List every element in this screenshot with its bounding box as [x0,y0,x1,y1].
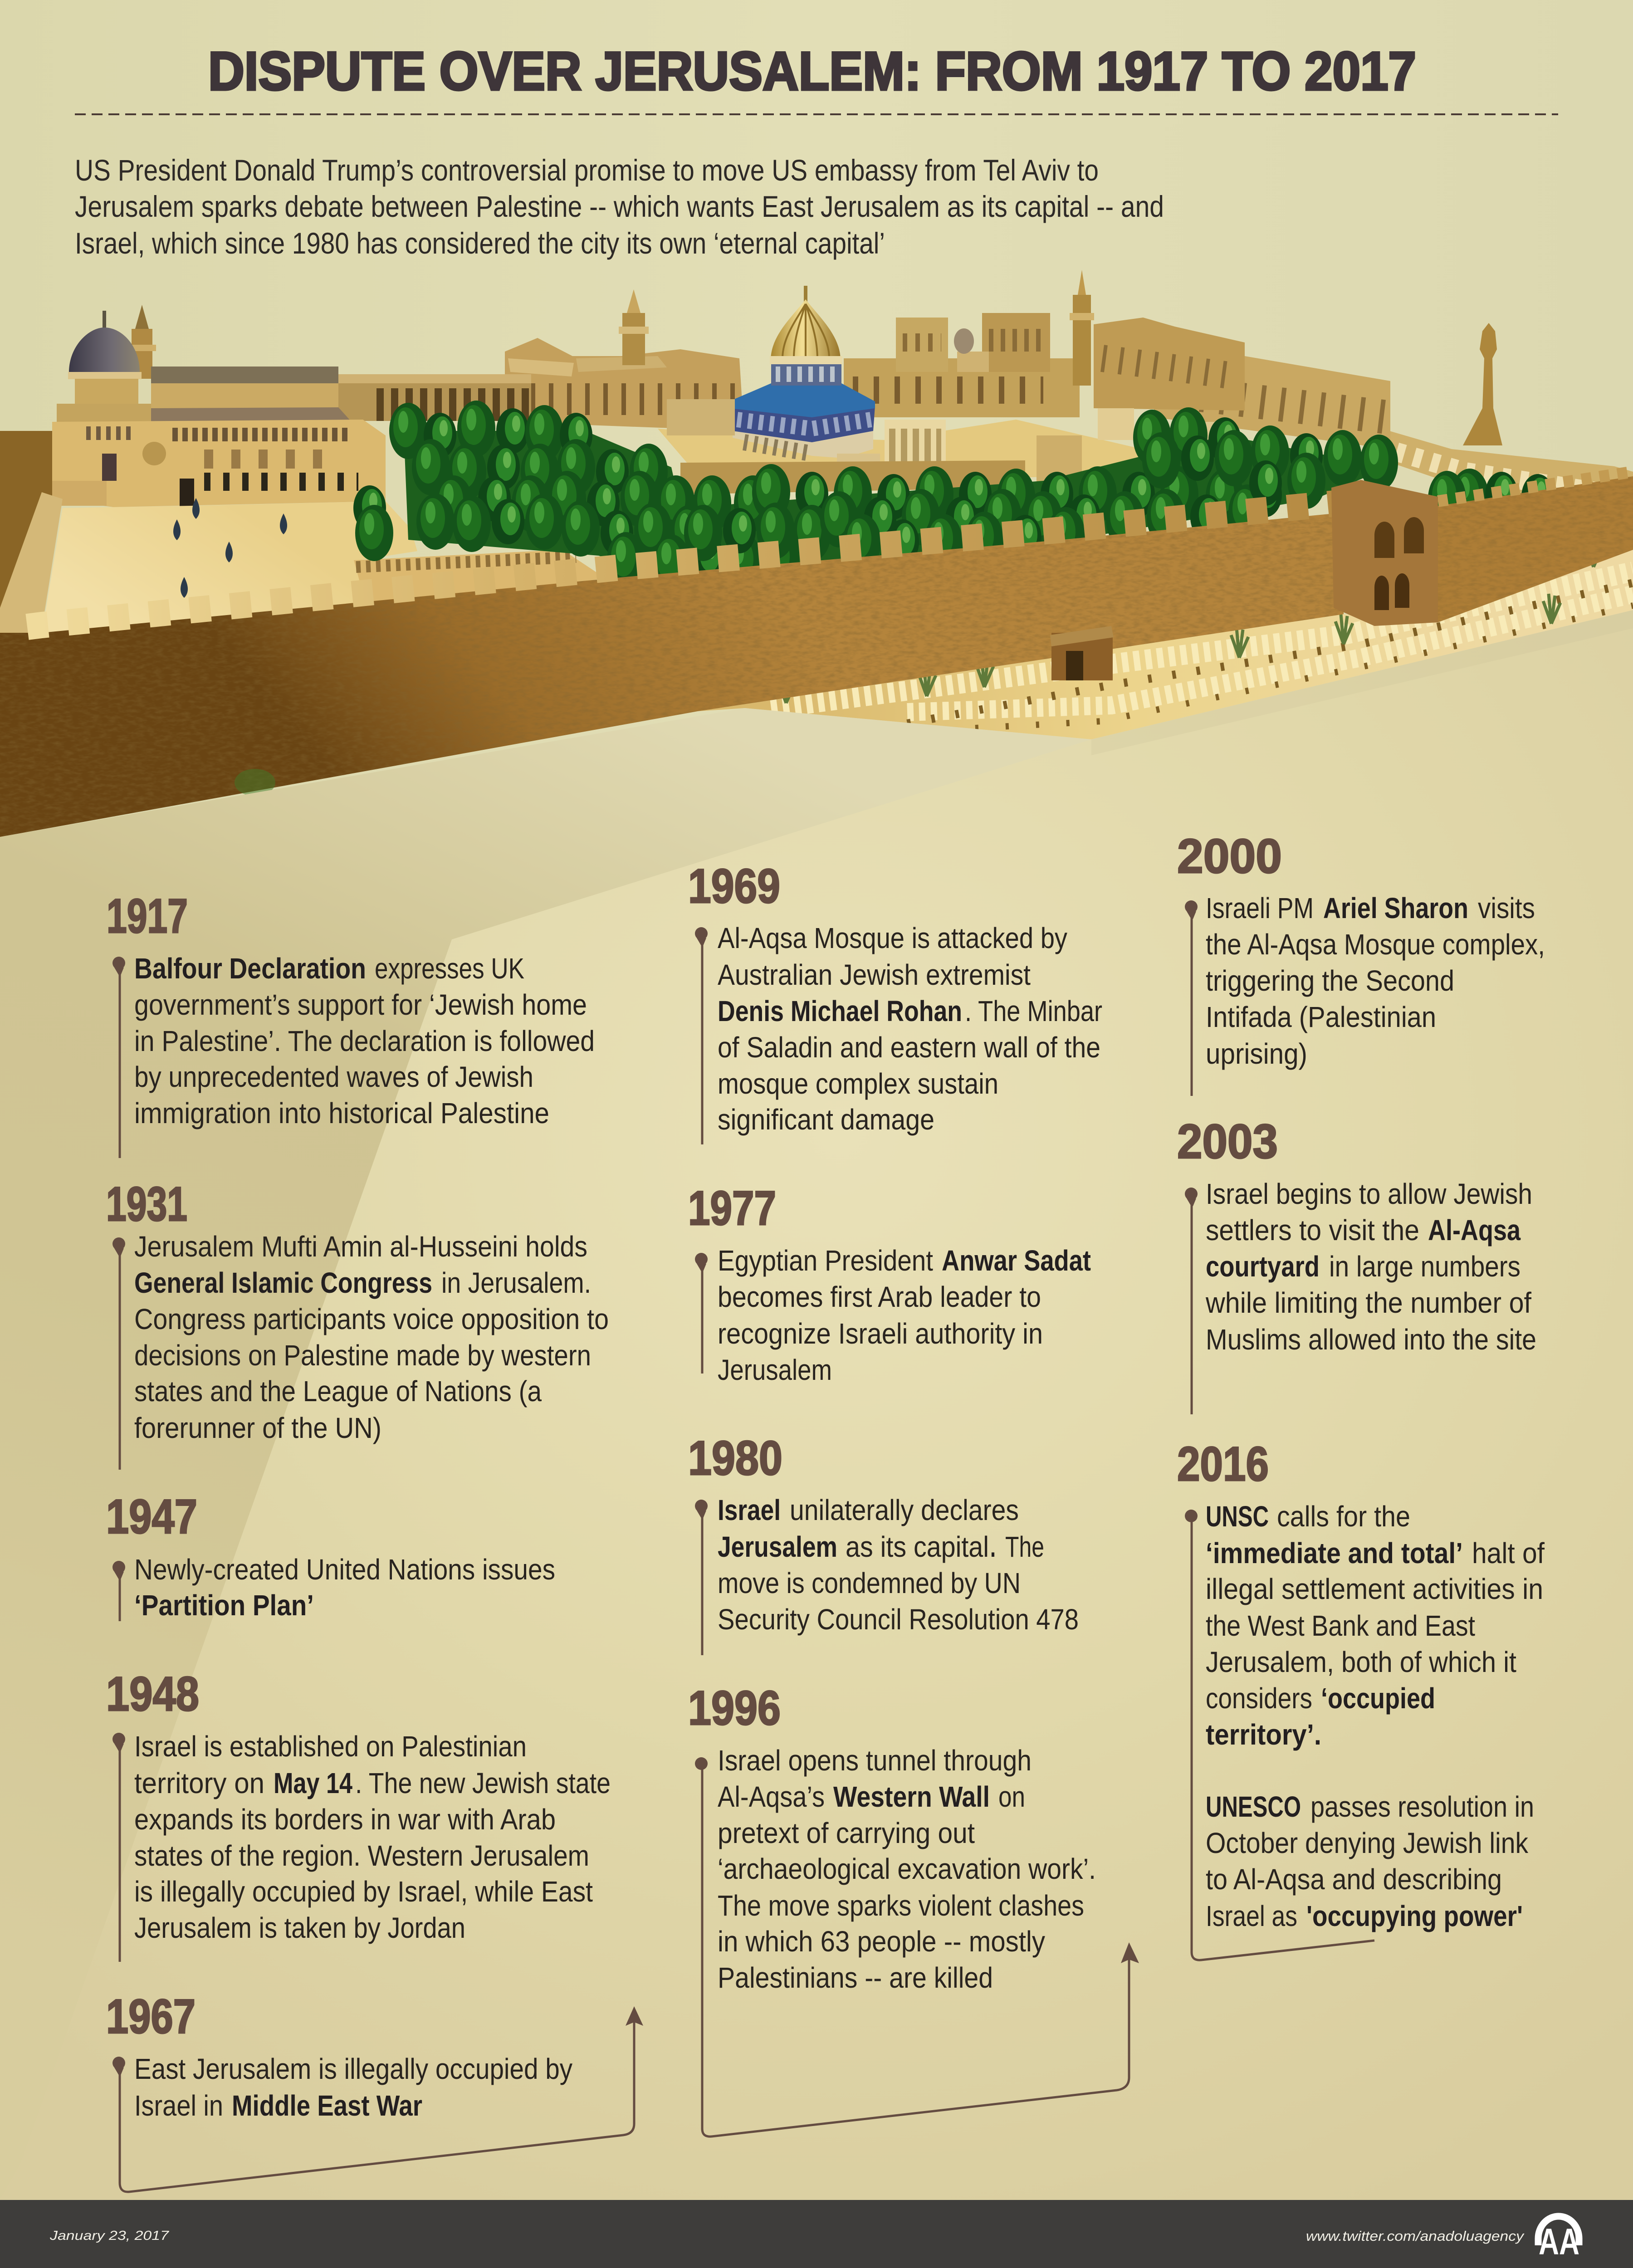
entry: 1977: recognize Israeli authority in [718,1317,1043,1350]
intro paragraph: Israel, which since 1980 has considered the city its own ‘eternal capital’ [75,226,885,260]
title: DISPUTE OVER JERUSALEM: FROM 1917 TO 2017 [208,41,1416,102]
entry: 2003: settlers to visit the [1206,1214,1419,1246]
entry: 1996: The move sparks violent clashes [718,1889,1084,1922]
arrow: column 2 to column 3 [702,1764,1139,2136]
entry: 1980: move is condemned by UN [718,1567,1021,1599]
entry: 1967: Israel in [134,2089,223,2122]
entry: 2016: October denying Jewish link [1206,1827,1529,1859]
entry: 1917 [107,889,595,1158]
entry: 1996: Western Wall [833,1780,990,1813]
entry: 2016: UNESCO [1206,1790,1301,1823]
intro paragraph [75,153,1164,260]
entry: 2000: uprising) [1206,1037,1307,1070]
entry: 2016: ‘immediate and total’ [1206,1537,1463,1569]
entry: 2003: 2003 [1177,1114,1278,1168]
footer bar [0,2200,1633,2268]
entry: 1996: in which 63 people -- mostly [718,1925,1045,1958]
intro paragraph: Jerusalem sparks debate between Palestine -- which wants East Jerusalem as its capital -- and [75,190,1164,223]
entry: 1996: ‘archaeological excavation work’. [718,1853,1096,1885]
entry: 1948: territory on [134,1767,264,1799]
entry: 1980: The [1005,1530,1044,1563]
entry: 2003: Muslims allowed into the site [1206,1323,1536,1356]
entry: 2016: halt of [1472,1537,1545,1569]
entry: 1931: forerunner of the UN) [134,1412,381,1444]
entry: 2000: the Al-Aqsa Mosque complex, [1206,928,1545,961]
entry: 2016: the West Bank and East [1206,1609,1475,1642]
entry: 1948: May 14 [274,1767,352,1799]
entry: 1969 [688,859,1102,1144]
entry: 1980 [688,1431,1079,1655]
entry: 1931: Jerusalem Mufti Amin al-Husseini holds [134,1230,587,1263]
tall central minaret [1070,270,1094,386]
connector: end of timeline [1192,1516,1374,1960]
entry: 1948: states of the region. Western Jerusalem [134,1839,589,1872]
entry: 1947 [106,1489,555,1622]
entry: 1948: . The new Jewish state [355,1767,611,1799]
entry: 1977: Anwar Sadat [942,1244,1091,1277]
entry: 1917: government’s support for ‘Jewish home [134,988,587,1021]
entry: 1917: expresses UK [375,952,524,985]
entry: 1996: pretext of carrying out [718,1817,975,1849]
entry: 2016: ‘occupied [1321,1682,1435,1715]
entry: 2016 [1177,1437,1545,1932]
entry: 1977: becomes first Arab leader to [718,1281,1041,1313]
entry: 1996 [688,1681,1096,1994]
plaza [41,501,417,640]
far left wall [0,431,54,635]
entry: 1917: by unprecedented waves of Jewish [134,1061,533,1093]
entry: 1948: Jerusalem is taken by Jordan [134,1911,465,1944]
entry: 1969: Australian Jewish extremist [718,958,1031,991]
sunken court [354,550,606,610]
entry: 2000: Ariel Sharon [1323,892,1468,924]
entry: 1969: Denis Michael Rohan [718,995,962,1027]
lower paper panel, light [0,610,1633,2200]
entry: 1948: 1948 [106,1667,199,1721]
entry: 1947: ‘Partition Plan’ [134,1589,314,1622]
entry: 1931: states and the League of Nations (a [134,1375,542,1408]
entry: 1931: decisions on Palestine made by western [134,1339,591,1372]
entry: 1980: unilaterally declares [790,1494,1019,1526]
entry: 1996: Israel opens tunnel through [718,1744,1032,1777]
entry: 1980: 1980 [688,1431,782,1485]
gate tower [1331,480,1438,626]
entry: 1948: Israel is established on Palestinian [134,1730,527,1763]
entry: 1967 [106,1989,572,2122]
entry: 2016: calls for the [1277,1500,1410,1533]
entry: 1969: of Saladin and eastern wall of the [718,1031,1100,1064]
entry: 2016: considers [1206,1682,1312,1715]
entry: 2016: to Al-Aqsa and describing [1206,1863,1502,1896]
right wall [1438,472,1633,622]
entry: 1996: Palestinians -- are killed [718,1961,993,1994]
icon: Anadolu Agency logo: AA [1539,2221,1579,2263]
entry: 1996: on [998,1780,1025,1813]
footer date: January 23, 2017 [49,2229,170,2243]
terrace wall [680,460,1025,494]
trees [353,401,1554,591]
entry: 2016: 'occupying power' [1306,1900,1523,1932]
entry: 2000: Intifada (Palestinian [1206,1001,1436,1033]
illustration: model of the Al-Aqsa compound [0,270,1633,837]
entry: 1980: Security Council Resolution 478 [718,1603,1079,1636]
entry: 1967: Middle East War [232,2089,422,2122]
entry: 2016: passes resolution in [1310,1790,1534,1823]
right arcade [1364,424,1633,508]
intro paragraph: US President Donald Trump’s controversial promise to move US embassy from Tel Aviv to [75,153,1099,187]
entry: 2003: while limiting the number of [1205,1286,1531,1319]
entry: 1947: 1947 [106,1489,197,1544]
entry: 2000: 2000 [1177,829,1282,883]
entry: 2000: visits [1478,892,1535,924]
entry: 1980: Israel [718,1494,781,1526]
entry: 2000: Israeli PM [1206,892,1314,924]
footer link: www.twitter.com/anadoluagency [1306,2228,1525,2244]
ground with graves [698,537,1633,739]
entry: 1969: significant damage [718,1103,934,1136]
entry: 2000 [1177,829,1545,1096]
far minaret, right [1463,323,1502,445]
entry: 2016: territory’. [1206,1718,1321,1751]
entry: 2003: Israel begins to allow Jewish [1206,1178,1532,1210]
entry: 1947: Newly-created United Nations issues [134,1553,555,1586]
entry: 1980: Jerusalem [718,1530,837,1563]
icon: Anadolu Agency logo [1538,2216,1579,2263]
Dome of the Rock [729,286,875,458]
entry: 2016: Jerusalem, both of which it [1206,1646,1516,1678]
courtyard platform [658,420,1161,481]
entry: 1931: 1931 [106,1177,187,1231]
gate box [1050,626,1114,680]
entry: 1917: Balfour Declaration [134,952,366,985]
right buildings [844,313,1390,449]
entry: 1931: Congress participants voice opposition to [134,1303,609,1335]
entry: 1931: in Jerusalem. [441,1266,591,1299]
entry: 1996: Al-Aqsa’s [718,1780,825,1813]
entry: 1980: as its capital [846,1530,989,1563]
entry: 1967: East Jerusalem is illegally occupied by [134,2053,572,2085]
entry: 2003: Al-Aqsa [1428,1214,1521,1246]
entry: 1977 [688,1181,1091,1386]
entry: 2003: in large numbers [1329,1250,1521,1283]
entry: 1917: immigration into historical Palestine [134,1097,549,1129]
entry: 2003 [1177,1114,1536,1414]
entry: 1977: Jerusalem [718,1354,832,1386]
entry: 1917: in Palestine’. The declaration is followed [134,1025,595,1057]
entry: 2016: illegal settlement activities in [1206,1573,1543,1605]
arrow: column 1 to column 2 [120,2006,643,2192]
colonnade [338,374,531,421]
entry: 2016: Israel as [1206,1900,1297,1932]
entry: 1969: Al-Aqsa Mosque is attacked by [718,922,1067,954]
entry: 1969: mosque complex sustain [718,1067,998,1100]
entry: 1948: expands its borders in war with Arab [134,1803,556,1836]
central buildings [505,289,744,431]
entry: 1977: Egyptian President [718,1244,933,1277]
entry: 1948: is illegally occupied by Israel, while East [134,1875,593,1908]
entry: 2003: courtyard [1206,1250,1320,1283]
tree ground [404,431,1388,585]
entry: 1969: . The Minbar [965,995,1102,1027]
entry: 1996: 1996 [688,1681,781,1735]
entry: 1977: 1977 [688,1181,776,1235]
Al-Aqsa Mosque [52,305,386,510]
lower paper panel, left [0,610,1633,2200]
entry: 2016: 2016 [1177,1437,1269,1491]
entry: 1917: 1917 [107,889,188,943]
entry: 2000: triggering the Second [1206,964,1454,997]
entry: 1948 [106,1667,611,1962]
city wall [0,503,1344,837]
plaza lamps [173,498,287,598]
cream side wall [0,492,63,644]
entry: 1980: . [990,1530,996,1563]
entry: 1931 [106,1177,609,1470]
entry: 2016: UNSC [1206,1500,1269,1533]
entry: 1931: General Islamic Congress [134,1266,432,1299]
entry: 1969: 1969 [688,859,780,913]
small pavilions in the court [667,399,1216,490]
entry: 1967: 1967 [106,1989,196,2043]
